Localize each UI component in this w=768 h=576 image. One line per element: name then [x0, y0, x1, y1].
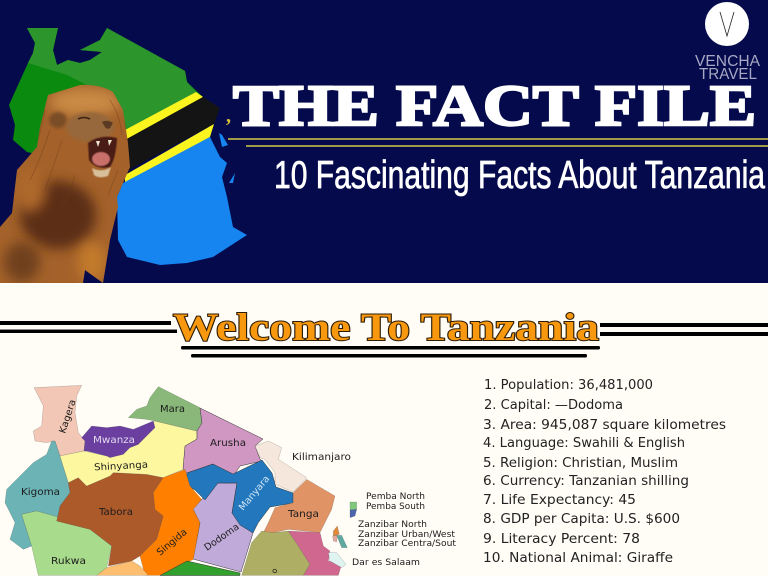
region: Rukwa	[22, 511, 112, 575]
fact list: 9. Literacy Percent: 78	[483, 531, 640, 547]
map labels: Rukwa	[51, 556, 86, 567]
region: Kagera	[33, 385, 85, 456]
map of Tanzania regions	[5, 385, 357, 576]
region: Iringa	[160, 561, 240, 576]
logo: Vencha Travel: VENCHA	[695, 53, 761, 70]
region: Tanga	[262, 479, 335, 536]
lion mouth	[88, 137, 117, 177]
section heading: Welcome To Tanzania: Welcome To Tanzania	[173, 306, 599, 349]
map labels: Manyara	[237, 474, 272, 513]
map labels: o	[269, 567, 280, 575]
map labels: Zanzibar Centra/Sout	[358, 539, 456, 549]
fact list	[483, 377, 726, 566]
logo: Vencha Travel	[695, 2, 761, 83]
region: Dar es Salaam	[328, 553, 346, 568]
comma mark on title: ,	[226, 105, 231, 127]
map labels: Singida	[155, 527, 190, 558]
header banner	[0, 0, 768, 283]
heading: The Fact File: THE FACT FILE	[233, 73, 756, 138]
map labels: Arusha	[210, 438, 246, 449]
region: Mbeya	[97, 561, 148, 575]
map labels: Pemba North	[366, 492, 425, 502]
map labels: Zanzibar Urban/West	[358, 530, 455, 540]
icon: Tanzania flag map	[9, 28, 247, 265]
icon: roaring lion	[0, 80, 135, 283]
fact list: 2. Capital: —Dodoma	[484, 397, 623, 413]
region: Kigoma	[5, 441, 70, 549]
map labels: Tabora	[98, 507, 133, 518]
region: Morogoro	[242, 531, 310, 575]
region: Manyara	[186, 460, 293, 533]
region: Mwanza	[82, 421, 155, 458]
region: Arusha	[183, 408, 263, 478]
map labels: Dar es Salaam	[352, 558, 420, 568]
fact list: 6. Currency: Tanzanian shilling	[483, 473, 689, 489]
islands: Pemba	[350, 502, 357, 518]
logo: Vencha Travel: TRAVEL	[699, 66, 757, 83]
region: Dodoma	[193, 483, 253, 572]
map labels: Tanga	[287, 509, 319, 520]
region: Kilimanjaro	[255, 441, 307, 492]
region: Pwani	[288, 531, 342, 575]
fact list: 3. Area: 945,087 square kilometres	[483, 417, 726, 433]
map labels: Kagera	[57, 398, 79, 435]
fact list: 4. Language: Swahili & English	[483, 435, 685, 451]
fact list: 5. Religion: Christian, Muslim	[483, 455, 678, 471]
fact list: 7. Life Expectancy: 45	[483, 492, 636, 508]
region: Shinyanga	[60, 421, 197, 486]
map labels: Zanzibar North	[358, 520, 427, 530]
region: Tabora	[57, 473, 163, 566]
map labels: Shinyanga	[94, 460, 148, 473]
region: Mara	[128, 387, 202, 431]
map labels: Mwanza	[93, 435, 135, 446]
map labels: Dodoma	[202, 522, 241, 553]
section heading: Welcome To Tanzania	[0, 306, 768, 358]
fact list: 1. Population: 36,481,000	[484, 377, 653, 393]
map labels	[21, 398, 456, 575]
fact list: 8. GDP per Capita: U.S. $600	[483, 511, 680, 527]
map labels: Mara	[160, 404, 185, 415]
double gold rule	[228, 138, 768, 147]
map labels: Kigoma	[21, 487, 60, 498]
fact list: 10. National Animal: Giraffe	[483, 550, 673, 566]
islands: Zanzibar	[333, 526, 347, 548]
region: Singida	[140, 469, 202, 575]
map labels: Kilimanjaro	[292, 452, 351, 463]
map labels: Pemba South	[366, 502, 425, 512]
